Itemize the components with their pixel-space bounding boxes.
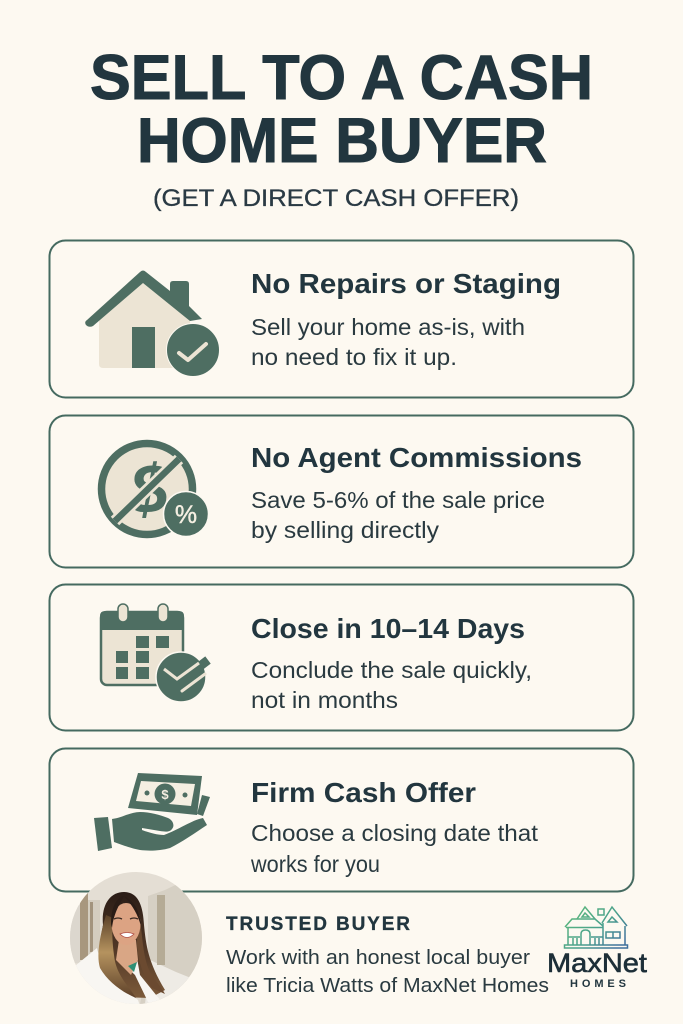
icon: hand holding cash xyxy=(94,773,210,851)
title: SELL TO A CASH xyxy=(90,43,593,113)
text block: no need to fix it up. xyxy=(251,344,457,370)
heading: Firm Cash Offer xyxy=(251,777,476,808)
heading: Close in 10–14 Days xyxy=(251,613,525,644)
text block: not in months xyxy=(251,687,398,713)
front hair strands xyxy=(98,915,136,998)
heading: No Repairs or Staging xyxy=(251,268,561,299)
icon: house with check xyxy=(85,270,220,376)
text block: Save 5-6% of the sale price xyxy=(251,487,545,513)
icon: crossed dollar with percent: $ xyxy=(129,450,170,528)
text block: by selling directly xyxy=(251,517,439,543)
title: HOME BUYER xyxy=(137,106,547,176)
title xyxy=(90,43,593,176)
face xyxy=(112,903,140,945)
text block: works for you xyxy=(250,851,380,877)
subtitle: (GET A DIRECT CASH OFFER) xyxy=(153,185,519,212)
panel: firm cash offer xyxy=(50,748,634,892)
hair back xyxy=(100,892,165,998)
jacket xyxy=(76,948,139,1004)
text block xyxy=(251,657,532,713)
text block: Sell your home as-is, with xyxy=(251,314,525,340)
icon: hand holding cash: $ xyxy=(161,787,169,802)
text block: Choose a closing date that xyxy=(251,820,538,846)
text block xyxy=(251,487,545,543)
heading: No Agent Commissions xyxy=(251,442,582,473)
panel: no repairs or staging xyxy=(50,240,634,398)
panel: no agent commissions xyxy=(50,416,634,568)
text block xyxy=(250,820,538,877)
icon: calendar with check xyxy=(100,604,208,702)
panel: close in 10-14 days xyxy=(50,584,634,730)
icon: crossed dollar with percent xyxy=(102,444,208,536)
icon: crossed dollar with percent: % xyxy=(175,501,197,529)
logo: MaxNet Homes xyxy=(547,907,648,990)
text block: Conclude the sale quickly, xyxy=(251,657,532,683)
neck and chest xyxy=(116,940,138,975)
text block: trusted buyer xyxy=(226,947,549,997)
text block: trusted buyer: like Tricia Watts of MaxNet Homes xyxy=(226,975,549,997)
icon: logo house xyxy=(564,907,628,948)
sub-wordmark: HOMES xyxy=(570,978,626,990)
photo: Tricia Watts portrait xyxy=(70,872,202,1006)
text block xyxy=(251,314,525,370)
wordmark: MaxNet xyxy=(547,948,648,978)
heading: trusted buyer: TRUSTED BUYER xyxy=(226,914,410,935)
text block: trusted buyer: Work with an honest local buyer xyxy=(226,947,530,969)
